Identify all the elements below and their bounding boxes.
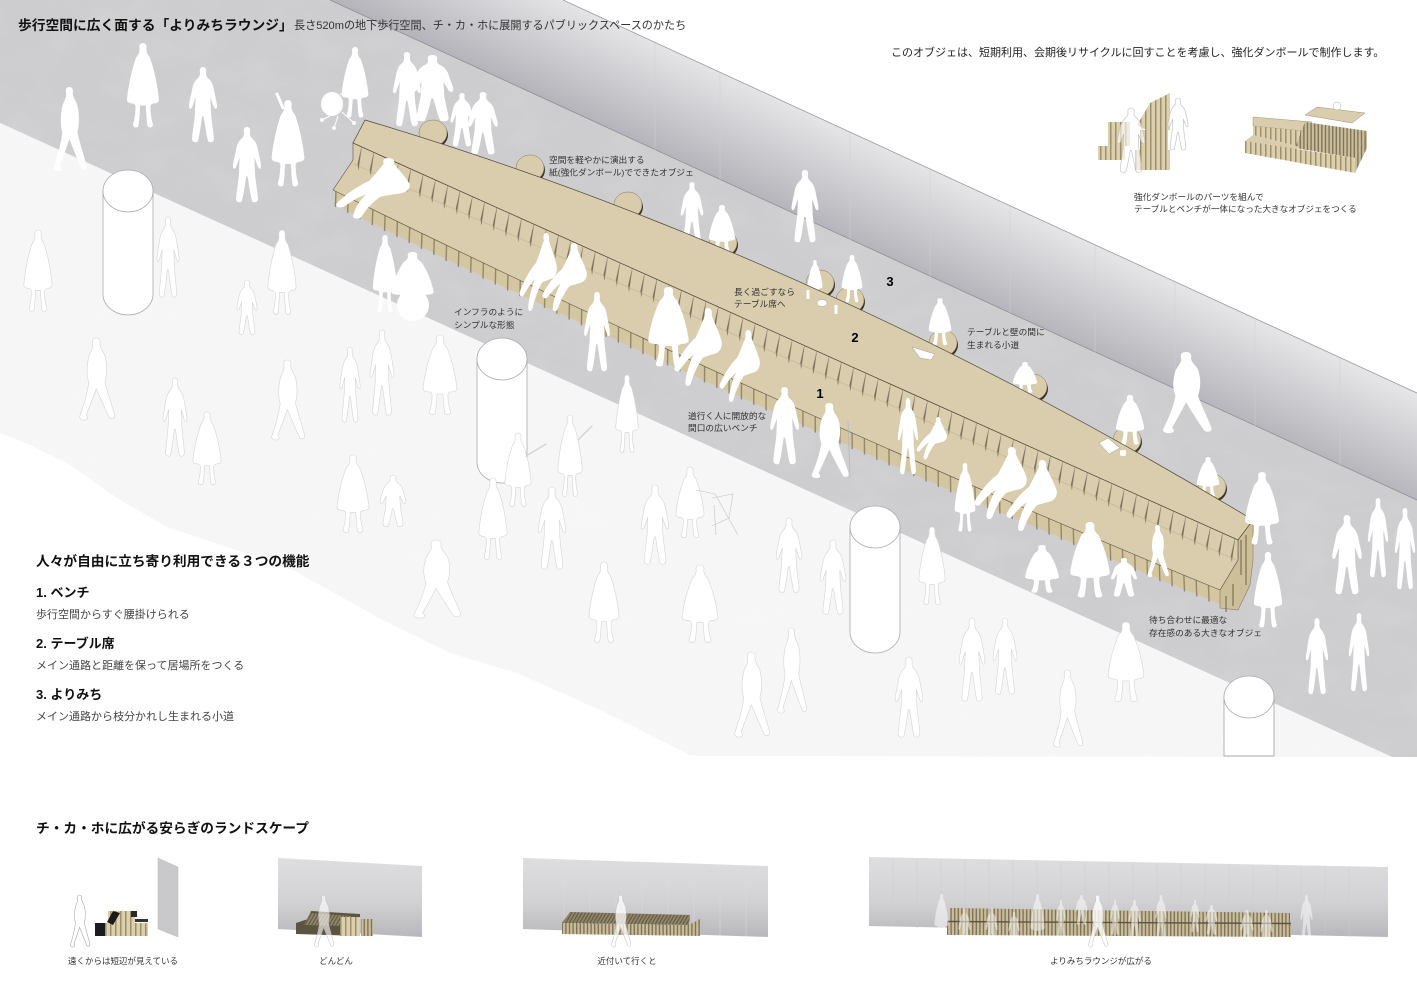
annotation: open bench: 間口の広いベンチ [688,423,758,433]
function 3: メイン通路から枝分かれし生まれる小道 [36,709,234,723]
annotation: path by wall [967,326,1045,350]
annotation: meeting spot: 待ち合わせに最適な [1149,614,1228,625]
function 2: 2. テーブル席 [36,636,115,651]
scene 1: seen from afar [68,858,178,966]
icon: cardboard parts being assembled [1098,93,1188,172]
caption: cardboard parts: テーブルとベンチが一体になった大きなオブジェをつくる [1134,203,1357,214]
function 2: メイン通路と距離を保って居場所をつくる [36,658,244,672]
bench front ribs [335,198,1220,606]
people on the pale concourse [24,217,1144,747]
numbered markers: 3 [886,274,894,289]
panel: three functions [36,553,310,723]
scene 1: seen from afar: 遠くからは短辺が見えている [68,956,178,966]
numbered markers: 1 [816,386,824,401]
people behind the table [393,52,1219,497]
function 3 [36,687,234,723]
annotation: path by wall: 生まれる小道 [967,339,1019,350]
scene 4: lounge spreads out [869,857,1388,966]
subtitle: 長さ520mの地下歩行空間、チ・カ・ホに展開するパブリックスペースのかたち [294,18,686,32]
annotation: meeting spot: 存在感のある大きなオブジェ [1149,627,1262,638]
icon: assembled cardboard object [1245,102,1367,173]
annotation: path by wall: テーブルと壁の間に [967,326,1045,337]
annotation: paper object: 紙(強化ダンボール)でできたオブジェ [549,166,694,178]
annotation: paper object: 空間を軽やかに演出する [549,154,645,165]
annotation: open bench: 道行く人に開放的な [688,410,766,421]
scene 3: closer still [523,858,768,966]
annotation: open bench [688,410,766,433]
heading: 人々が自由に立ち寄り利用できる３つの機能 [36,553,310,569]
annotation: simple form [454,307,523,330]
table end supports [1220,520,1253,610]
annotation: simple form: シンプルな形態 [454,319,515,330]
floor texture [0,0,1417,757]
numbered markers [816,274,894,401]
annotation: table seats: テーブル席へ [734,298,786,309]
scene 4: lounge spreads out: よりみちラウンジが広がる [1050,956,1152,966]
stroller [320,84,356,130]
function 2 [36,636,244,672]
floor: pale open concourse [0,123,1392,757]
cylindrical columns [103,170,1274,756]
scene 2: getting closer: どんどん [319,956,353,966]
people in the concrete walkway and on the bench [54,43,1415,694]
function 1: 1. ベンチ [36,585,89,600]
title: 歩行空間に広く面する「よりみちラウンジ」 [18,17,293,33]
floor: concrete walkway [0,0,1417,757]
wall along the walkway [330,0,1417,500]
annotation: meeting spot [1149,614,1262,638]
function 1 [36,585,190,621]
table top [353,120,1253,540]
caption: cardboard parts [1134,191,1357,214]
yorimichi lounge: long cardboard table and bench [333,120,1253,612]
items on table [806,290,1126,456]
scene 3: closer still: 近付いて行くと [597,956,657,966]
annotation: table seats [734,286,795,309]
round stools behind the table [419,120,1227,502]
heading: landscape: チ・カ・ホに広がる安らぎのランドスケープ [36,820,309,836]
table legs [353,143,1238,565]
bench seat [333,143,1238,590]
annotation: table seats: 長く過ごすなら [734,286,795,297]
annotation: paper object [549,154,694,178]
annotation: simple form: インフラのように [454,307,523,317]
function 3: 3. よりみち [36,687,102,702]
caption: cardboard parts: 強化ダンボールのパーツを組んで [1134,191,1264,202]
function 1: 歩行空間からすぐ腰掛けられる [36,607,190,621]
note on material: このオブジェは、短期利用、会期後リサイクルに回すことを考慮し、強化ダンボールで制作します。 [891,45,1384,59]
numbered markers: 2 [851,330,859,345]
scene 2: getting closer [278,858,422,966]
